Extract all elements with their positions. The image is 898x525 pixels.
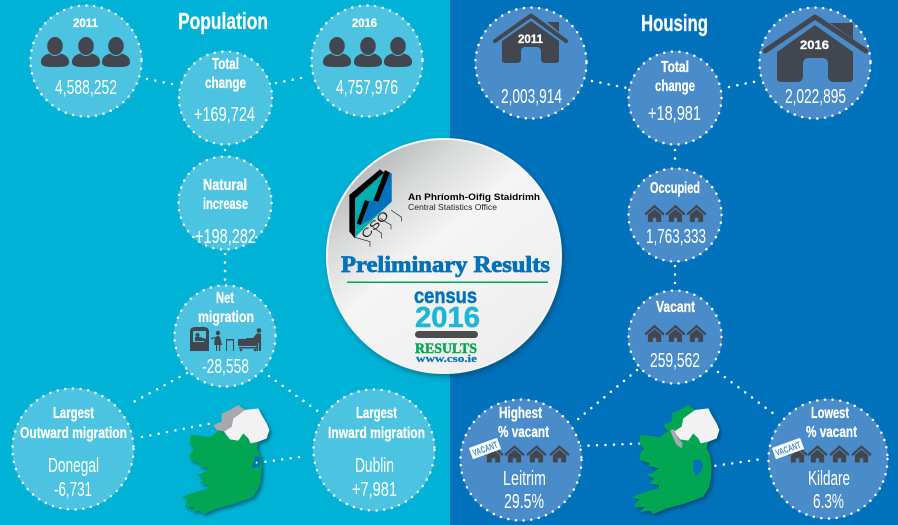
circle: vacant xyxy=(628,290,722,384)
icon: CSO logo xyxy=(349,169,402,247)
map: Ireland, Donegal and Dublin highlighted xyxy=(182,405,269,514)
circle: population 2016: 2016 xyxy=(352,16,377,30)
panel: population background xyxy=(0,0,450,525)
heading: Housing: Housing xyxy=(641,10,708,36)
circle: highest % vacant: 29.5% xyxy=(504,491,544,513)
circle: vacant: 259,562 xyxy=(650,350,700,372)
circle: largest outward migration: Largest xyxy=(53,405,94,422)
circle: largest inward migration: +7,981 xyxy=(352,479,397,501)
circle: lowest % vacant: Kildare xyxy=(808,468,850,490)
circle: largest inward migration: Dublin xyxy=(355,455,394,477)
circle: highest % vacant: Leitrim xyxy=(503,468,546,490)
text: office name: An Phríomh-Oifig Staidrimh xyxy=(408,192,540,203)
circle: housing 2011: 2,003,914 xyxy=(501,86,562,108)
circle: population 2011: 4,588,252 xyxy=(55,77,117,99)
logo: census 2016 results: census xyxy=(414,285,477,308)
circle: occupied: 1,763,333 xyxy=(646,226,706,248)
map: Ireland, Leitrim and Kildare highlighted xyxy=(632,405,719,514)
circle: largest inward migration: Inward migration xyxy=(328,425,425,442)
circle: net migration: Net xyxy=(216,290,234,307)
circle: largest outward migration: -6,731 xyxy=(54,479,92,501)
circle: largest outward migration xyxy=(12,388,134,510)
circle: population total change: Total xyxy=(212,56,239,73)
icon: vacant stamp: VACANT xyxy=(471,440,500,459)
circle: population total change: change xyxy=(205,75,246,92)
circle: housing 2011 xyxy=(475,7,587,119)
circle: housing 2016 xyxy=(759,7,871,119)
circle: housing total change: +18,981 xyxy=(648,103,701,125)
circle: net migration: migration xyxy=(198,309,254,326)
circle: lowest % vacant: 6.3% xyxy=(813,491,844,513)
logo: census 2016 results xyxy=(414,285,480,365)
icon: four houses lowest xyxy=(789,447,870,463)
circle: population total change: +169,724 xyxy=(194,104,255,126)
circle: net migration: -28,558 xyxy=(202,356,249,378)
circle: net migration xyxy=(174,285,276,387)
circle: population 2011 xyxy=(30,5,142,117)
icon: three vacant houses xyxy=(646,326,705,342)
panel: centre badge xyxy=(327,139,561,373)
icon: airport check-in xyxy=(190,327,261,351)
icon: vacant stamp lowest: VACANT xyxy=(774,440,803,459)
circle: lowest % vacant xyxy=(768,399,888,519)
circle: housing 2016: 2,022,895 xyxy=(785,86,846,108)
circle: occupied: Occupied xyxy=(650,180,700,197)
text: office name: Central Statistics Office xyxy=(408,202,497,212)
panel: housing xyxy=(460,7,888,521)
circle: population 2011: 2011 xyxy=(73,16,98,30)
circle: natural increase: Natural xyxy=(203,177,247,194)
circle: occupied xyxy=(628,168,722,262)
circle: largest inward migration: Largest xyxy=(356,405,397,422)
panel: population xyxy=(12,5,435,514)
icon: house 2011: 2011 xyxy=(518,32,543,46)
circle: highest % vacant: Highest xyxy=(499,405,542,422)
logo: census 2016 results: www.cso.ie xyxy=(416,354,478,365)
icon: three houses xyxy=(646,206,705,222)
heading: Population: Population xyxy=(178,8,268,34)
circle: lowest % vacant: Lowest xyxy=(811,405,849,422)
circle: largest outward migration: Outward migration xyxy=(20,425,127,442)
population connectors xyxy=(128,77,323,463)
circle: population 2016 xyxy=(311,5,423,117)
circle: housing total change xyxy=(628,51,722,145)
icon: CSO logo: CSO xyxy=(358,208,392,241)
circle: housing total change: change xyxy=(655,78,695,95)
housing connectors xyxy=(577,81,778,467)
icon: four houses xyxy=(485,447,568,463)
circle: population total change xyxy=(178,51,272,145)
circle: natural increase: +198,282 xyxy=(195,226,256,248)
circle: highest % vacant xyxy=(460,399,582,521)
icon: three people 2016 xyxy=(323,36,412,67)
circle: largest outward migration: Donegal xyxy=(48,455,99,477)
circle: highest % vacant: % vacant xyxy=(498,424,549,441)
circle: lowest % vacant: % vacant xyxy=(806,424,857,441)
circle: natural increase: increase xyxy=(203,196,248,213)
logo: census 2016 results: RESULTS xyxy=(415,341,477,357)
divider rule xyxy=(347,282,548,283)
panel: housing background xyxy=(450,0,898,525)
circle: housing total change: Total xyxy=(661,59,689,76)
heading: Preliminary Results: Preliminary Results xyxy=(341,252,550,277)
circle: vacant: Vacant xyxy=(656,299,695,316)
circle: largest inward migration xyxy=(313,389,435,511)
logo: census 2016 results: 2016 xyxy=(415,302,480,334)
icon: three people xyxy=(41,36,130,67)
icon: house 2016: 2016 xyxy=(800,38,829,52)
circle: population 2016: 4,757,976 xyxy=(336,77,398,99)
text: office name xyxy=(408,192,540,212)
circle: natural increase xyxy=(178,156,272,250)
